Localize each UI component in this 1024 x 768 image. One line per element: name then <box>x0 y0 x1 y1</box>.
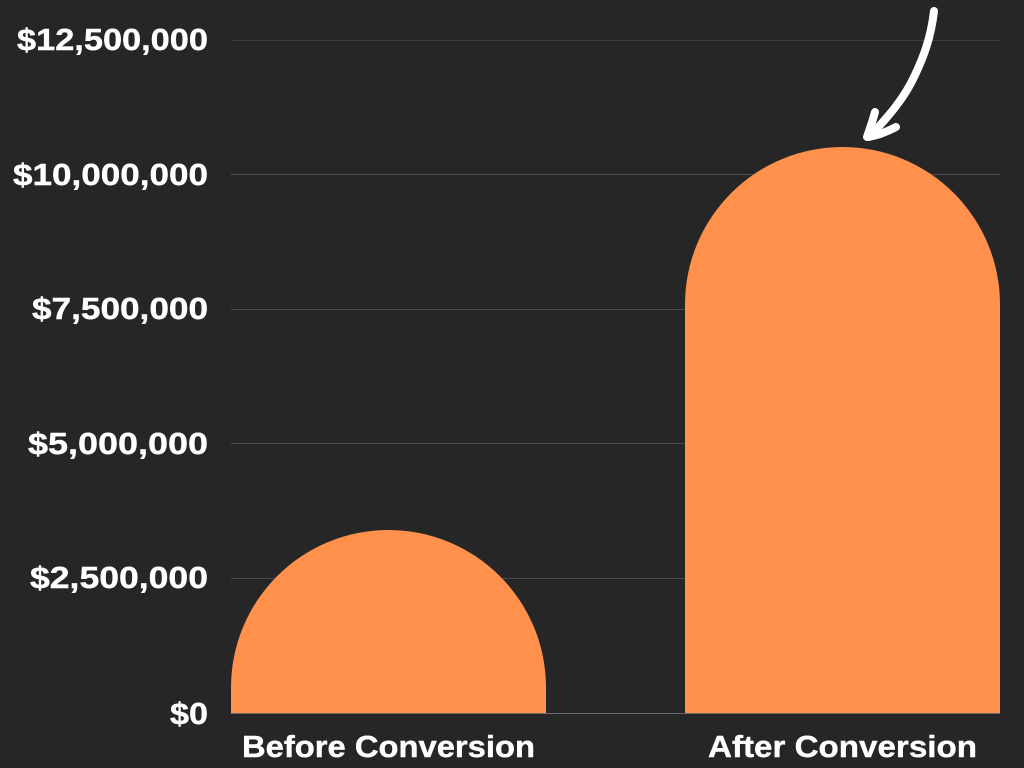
icon: hand-drawn arrow pointing at after-conversion bar <box>867 11 934 137</box>
y-axis labels: $12,500,000 <box>17 22 208 57</box>
y-axis labels: $2,500,000 <box>30 560 208 595</box>
y-axis labels: $5,000,000 <box>28 426 208 461</box>
bar: after conversion <box>685 147 1000 713</box>
category label: before conversion: Before Conversion <box>242 729 535 764</box>
y-axis labels: $0 <box>170 696 208 731</box>
y-axis labels: $7,500,000 <box>32 291 208 326</box>
y-axis labels: $10,000,000 <box>13 157 208 192</box>
y-axis labels <box>13 22 208 731</box>
bar: before conversion <box>231 530 546 713</box>
category label: after conversion: After Conversion <box>708 729 977 764</box>
